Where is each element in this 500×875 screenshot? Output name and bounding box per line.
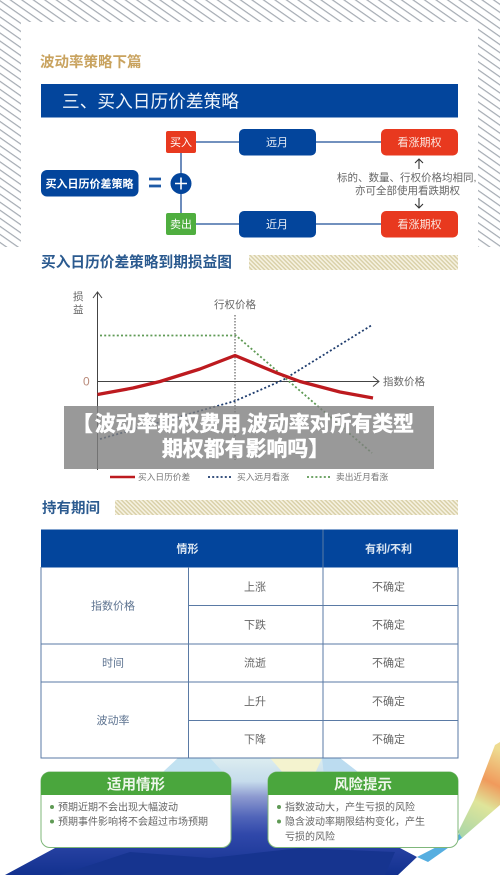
panel: applicable scenarios: 适用情形 (107, 776, 165, 794)
table cells: 不确定 (372, 580, 405, 594)
holding period heading: 持有期间 (42, 500, 100, 517)
overlay title: 波动率期权费用,波动率对所有类型 (95, 413, 414, 436)
legend (110, 471, 388, 482)
call option box bottom (381, 211, 458, 238)
axis labels: 0 (83, 374, 90, 388)
table cells: 时间 (102, 656, 124, 670)
near month box (239, 211, 316, 238)
strategy diagram (41, 129, 476, 238)
axes (93, 292, 379, 470)
table cells: 下跌 (244, 618, 266, 632)
sell tag (166, 213, 196, 235)
calendar spread line (98, 356, 373, 398)
buy tag (166, 131, 196, 153)
axis labels: 损 (73, 290, 84, 303)
title: 波动率策略下篇 (40, 53, 142, 71)
call option box top (381, 129, 458, 156)
call option box top: 看涨期权 (398, 135, 442, 149)
strategy label (41, 170, 138, 196)
table cells: 上升 (244, 695, 266, 708)
arrow up (415, 159, 423, 169)
axis labels (73, 290, 425, 388)
panel: applicable scenarios (41, 772, 231, 848)
axis labels: 益 (73, 303, 84, 316)
table cells: 不确定 (372, 732, 405, 746)
legend: 买入日历价差 (138, 471, 190, 482)
holding period heading (42, 500, 458, 517)
payoff chart (73, 290, 425, 482)
table header (41, 530, 458, 568)
section banner (41, 84, 458, 118)
chart heading: 买入日历价差策略到期损益图 (41, 253, 232, 271)
panel: risk warning: 隐含波动率期限结构变化，产生 (285, 815, 425, 828)
table cells: 不确定 (372, 618, 405, 632)
bottom mountain background (5, 742, 500, 875)
buy tag: 买入 (170, 136, 192, 149)
note text (337, 171, 476, 197)
panel: risk warning: 亏损的风险 (285, 830, 335, 843)
strike price line (234, 315, 236, 460)
panel: risk warning: 指数波动大，产生亏损的风险 (285, 800, 415, 814)
panel: applicable scenarios: 预期近期不会出现大幅波动 (58, 800, 178, 814)
note text: 标的、数量、行权价格均相同, (337, 171, 476, 184)
table cells: 不确定 (372, 656, 405, 670)
strategy label: 买入日历价差策略 (46, 176, 134, 190)
panel: risk warning (268, 772, 458, 848)
plus circle (170, 173, 192, 194)
legend: 卖出近月看涨 (336, 471, 388, 482)
table header: 有利/不利 (365, 542, 412, 556)
table cells: 指数价格 (91, 598, 135, 612)
axis labels: 指数价格 (383, 375, 425, 388)
long far call line (100, 325, 372, 439)
holding period table (41, 530, 458, 758)
far month box: 远月 (266, 136, 288, 149)
axis labels: 行权价格 (214, 298, 256, 311)
near month box: 近月 (266, 218, 288, 231)
overlay title (64, 406, 434, 469)
panel: applicable scenarios: 预期事件影响将不会超过市场预期 (58, 815, 208, 828)
sell tag: 卖出 (170, 217, 192, 231)
arrow down (415, 198, 423, 208)
table cells: 流逝 (244, 656, 266, 670)
table cells: 上涨 (244, 580, 266, 594)
table cells: 不确定 (372, 694, 405, 708)
short near call line (100, 336, 372, 453)
call option box bottom: 看涨期权 (398, 217, 442, 231)
legend: 买入远月看涨 (237, 472, 289, 482)
table cells: 波动率 (96, 713, 130, 727)
equals sign (149, 179, 161, 186)
table cells (91, 580, 405, 746)
section banner: 三、买入日历价差策略 (62, 92, 239, 112)
overlay title: 【 (72, 413, 93, 436)
overlay title: 期权都有影响吗】 (162, 438, 329, 460)
note text: 亦可全部使用看跌期权 (355, 184, 460, 197)
table header: 情形 (176, 542, 198, 556)
far month box (239, 129, 316, 156)
table cells: 下降 (244, 732, 266, 746)
chart heading (41, 253, 458, 271)
background hatch frame (0, 0, 500, 247)
panel: risk warning: 风险提示 (334, 776, 392, 794)
